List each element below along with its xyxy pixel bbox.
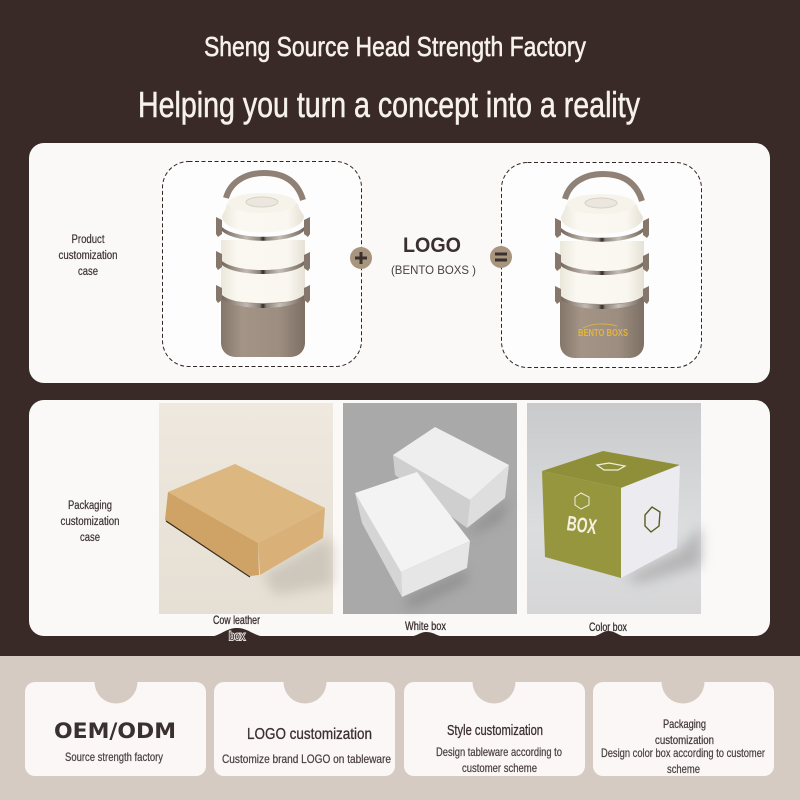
panel: packaging customization: [29, 400, 770, 643]
card: LOGO customization: [214, 682, 395, 776]
label: product customization case: [58, 234, 118, 278]
card: style customization: Style customization: [447, 722, 543, 739]
card: OEM/ODM: [25, 682, 206, 776]
card: OEM/ODM: Source strength factory: [65, 750, 163, 764]
icon: plus: [350, 247, 372, 269]
label: cow leather box: [213, 613, 260, 643]
label: product customization case: case: [78, 266, 98, 278]
branded product frame: [502, 162, 702, 368]
label: packaging customization case: case: [80, 532, 100, 544]
logo text: (BENTO BOXS ): [391, 263, 476, 277]
card: LOGO customization: Customize brand LOGO on tableware: [222, 752, 391, 766]
icon: branded lunch box: BENTO BOXS: [578, 327, 628, 339]
image: color box: BOX: [565, 512, 598, 539]
icon: branded lunch box: [555, 174, 649, 358]
plain product frame: [162, 162, 362, 366]
panel: product customization: [29, 143, 770, 383]
card: style customization: [404, 682, 585, 776]
label: color box: Color box: [589, 620, 627, 634]
label: product customization case: Product: [72, 234, 105, 246]
card: packaging customization: customization: [655, 733, 714, 747]
image: white boxes: [343, 403, 517, 614]
card: style customization: customer scheme: [462, 761, 537, 775]
card: packaging customization: scheme: [667, 762, 700, 776]
logo text: LOGO: [403, 234, 461, 257]
icon: plain lunch box: [216, 173, 310, 357]
icon: equals: [490, 246, 512, 268]
label: cow leather box: Cow leather: [213, 613, 260, 627]
title: subtitle: Helping you turn a concept into a reality: [138, 84, 640, 125]
logo text: [391, 234, 476, 277]
label: packaging customization case: Packaging: [68, 500, 112, 512]
card: packaging customization: Packaging: [663, 717, 706, 731]
label: cow leather box: box: [229, 629, 245, 643]
title: factory heading: Sheng Source Head Strength Factory: [204, 31, 586, 62]
image: color box: [527, 403, 701, 614]
card: style customization: Design tableware according to: [436, 745, 562, 759]
notch: label tabs: [210, 628, 627, 637]
label: white box: White box: [405, 619, 446, 633]
label: packaging customization case: customization: [60, 516, 120, 528]
panel: services band: [0, 656, 800, 800]
card: LOGO customization: LOGO customization: [247, 726, 372, 743]
card: packaging customization: [593, 682, 774, 776]
image: kraft box: [159, 403, 333, 614]
label: product customization case: customization: [58, 250, 118, 262]
card: OEM/ODM: OEM/ODM: [54, 719, 176, 743]
label: packaging customization case: [60, 500, 120, 544]
